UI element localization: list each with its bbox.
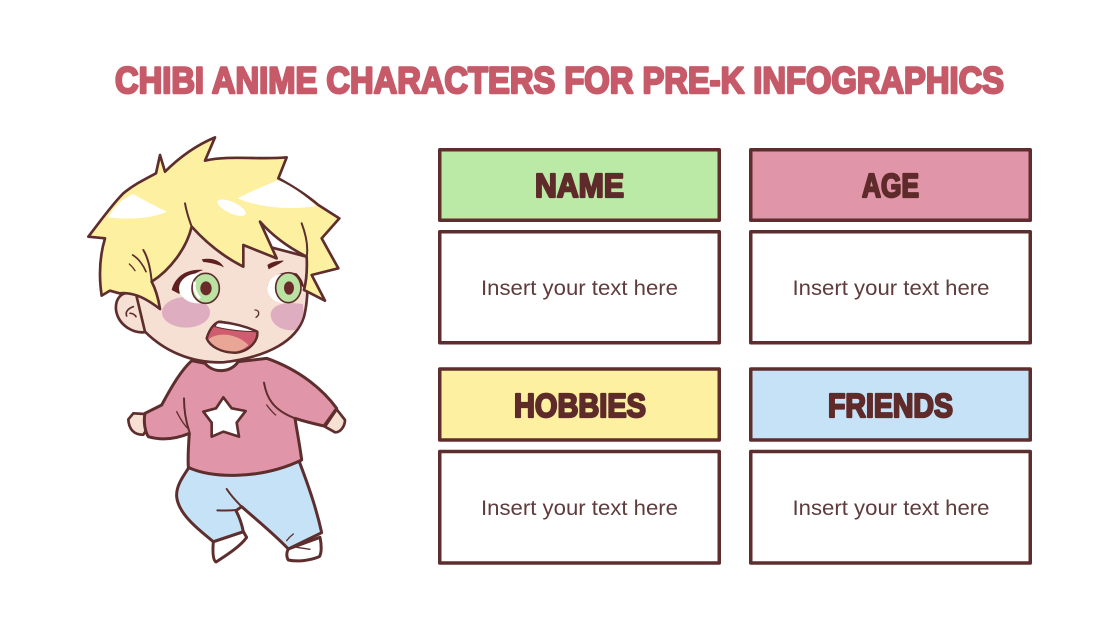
trousers — [177, 462, 322, 549]
name text block: Insert your text here — [481, 277, 678, 300]
mouth — [207, 322, 257, 353]
face — [137, 227, 308, 362]
hobbies heading: HOBBIES — [514, 387, 646, 424]
age heading: AGE — [862, 167, 919, 204]
hobbies heading — [440, 369, 719, 440]
blush — [162, 297, 303, 330]
name text block — [440, 232, 719, 343]
friends heading — [751, 369, 1030, 440]
hair highlights — [108, 180, 316, 219]
left eye — [172, 270, 219, 303]
sweater — [144, 358, 337, 475]
friends text block — [751, 452, 1030, 563]
title: CHIBI ANIME CHARACTERS FOR PRE-K INFOGRAPHICS — [115, 60, 1004, 101]
age heading — [751, 150, 1030, 220]
friends heading: FRIENDS — [828, 387, 953, 424]
hobbies text block: Insert your text here — [481, 497, 678, 520]
star on sweater — [203, 397, 246, 437]
panel: name — [440, 150, 719, 343]
panel: friends — [751, 369, 1030, 563]
shoes — [213, 532, 321, 562]
chibi character illustration — [88, 137, 345, 562]
character body — [128, 358, 345, 562]
character head — [88, 137, 339, 362]
name heading — [440, 150, 719, 220]
friends text block: Insert your text here — [792, 497, 990, 520]
name heading: NAME — [535, 167, 624, 204]
age text block — [751, 232, 1030, 343]
age text block: Insert your text here — [792, 277, 990, 300]
right eye — [267, 272, 304, 303]
hobbies text block — [440, 452, 719, 563]
panel: hobbies — [440, 369, 719, 563]
eyebrows — [202, 259, 284, 269]
nose — [255, 310, 259, 317]
hands — [128, 409, 345, 435]
ear — [116, 293, 160, 332]
panel: age — [751, 150, 1030, 343]
hair — [88, 137, 339, 309]
